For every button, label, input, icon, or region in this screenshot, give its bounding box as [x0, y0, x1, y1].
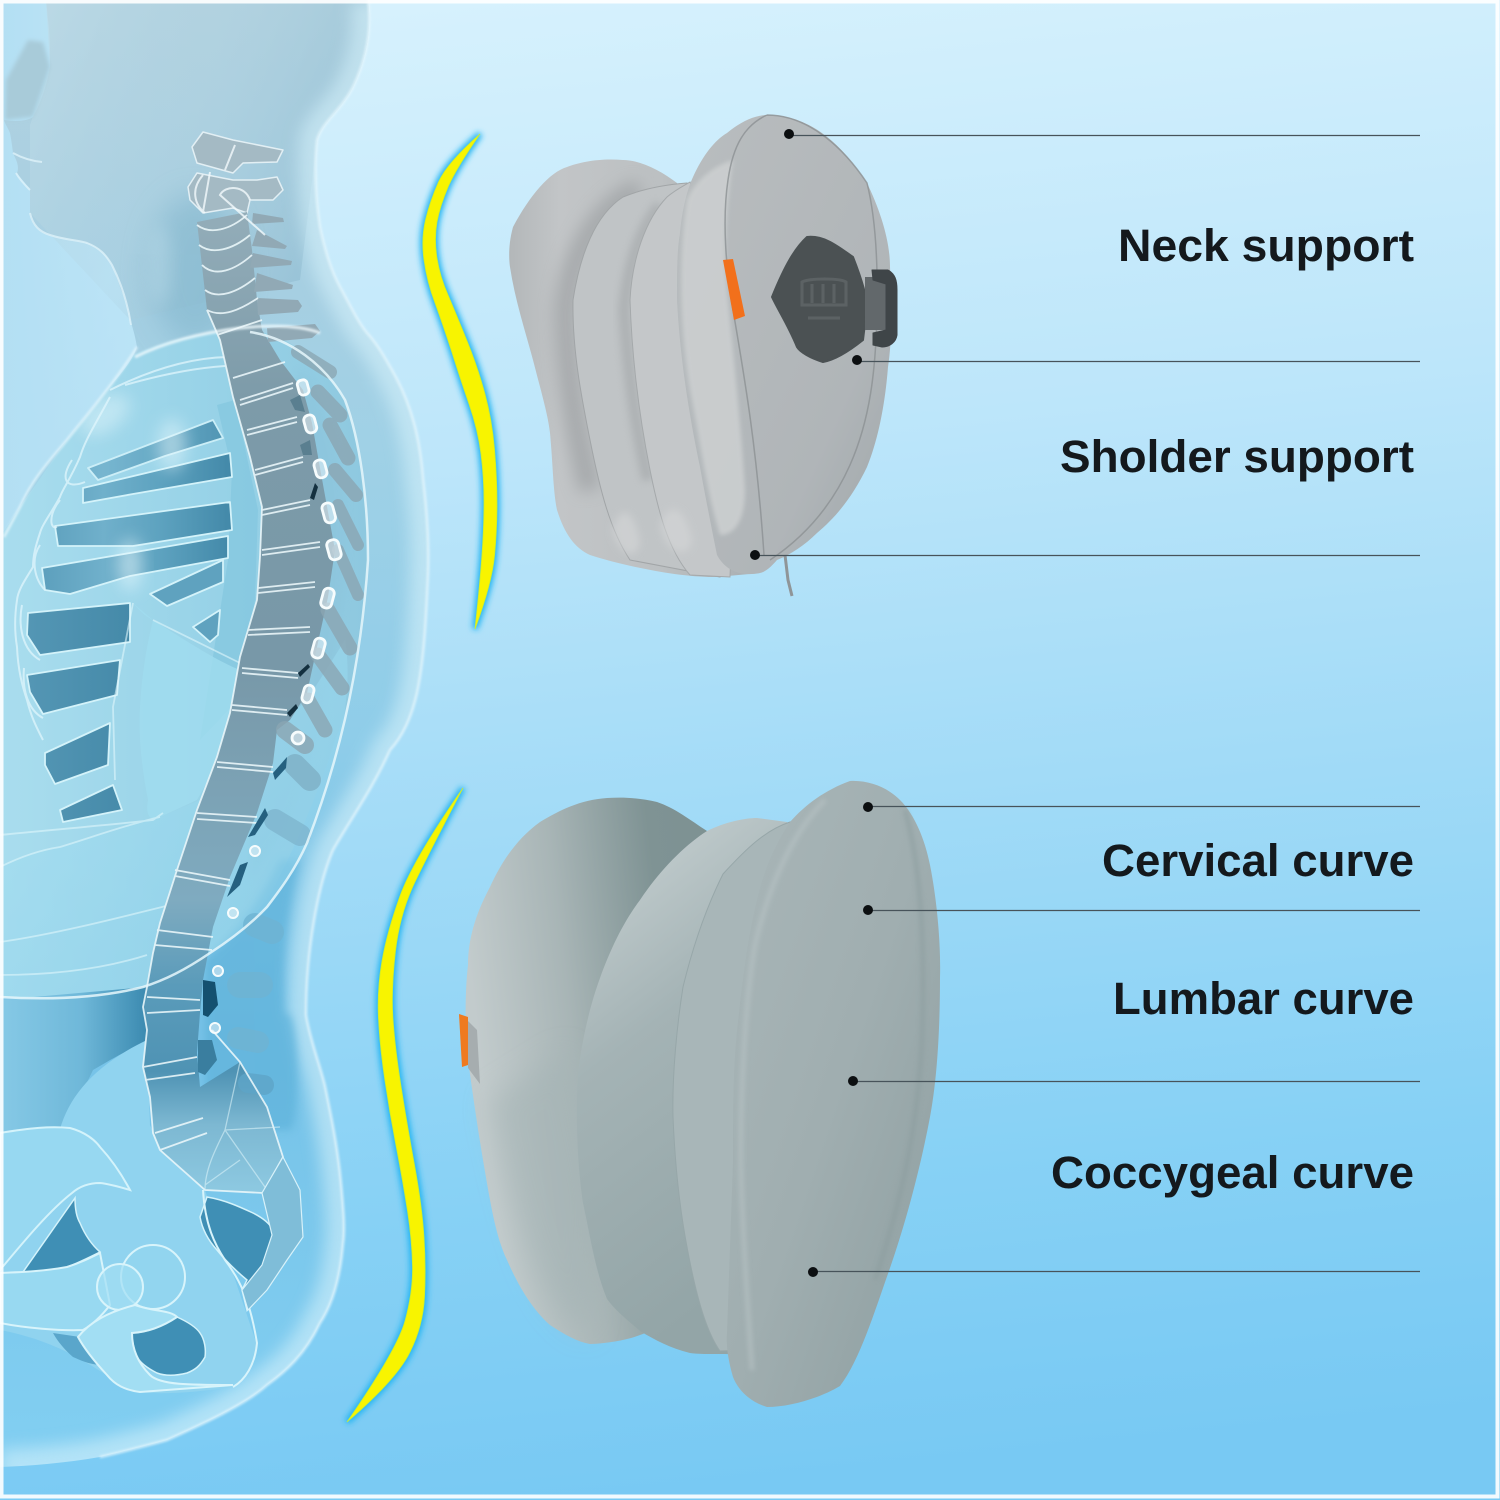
logo patch: [772, 237, 867, 362]
rib gaps: [27, 420, 232, 822]
orange tag: [723, 259, 745, 320]
lobe two crease: [624, 205, 660, 480]
upper arm: [133, 603, 240, 819]
neck highlight: [150, 234, 172, 297]
torso base: [0, 330, 368, 998]
patch logo mark: [802, 279, 846, 318]
ilium hook: [0, 1127, 130, 1270]
back lobe: [466, 798, 720, 1344]
right edge band: [875, 810, 923, 1280]
body outline glow: [4, 0, 428, 1457]
lower back shade: [205, 860, 300, 1130]
front body: [677, 115, 891, 574]
pelvis: [0, 1040, 257, 1393]
rib glows: [73, 386, 186, 591]
background left tint: [0, 0, 320, 560]
back spinous processes: [238, 352, 358, 1085]
label: Sholder support: Sholder support: [1060, 431, 1414, 482]
zipper pull: [785, 555, 792, 596]
mouth lines: [13, 153, 131, 325]
neck spinous processes: [250, 213, 320, 342]
back lobe lower lightening: [490, 1050, 600, 1335]
coccyx: [242, 1157, 303, 1310]
curve: lower spine: [347, 788, 463, 1422]
label: Neck support: Neck support: [1118, 220, 1414, 271]
stitched seam: [725, 115, 877, 560]
vertebral column: [143, 212, 335, 1193]
third lobe: [673, 822, 790, 1351]
spine: [135, 132, 358, 1310]
back lobe: [509, 159, 760, 577]
femur and hip joint: [0, 1190, 257, 1392]
strap: [865, 277, 887, 330]
nose shading: [5, 40, 50, 120]
rim glow clipped to body: [0, 0, 428, 1467]
facet joints: [210, 379, 342, 1033]
illustration: transparent human body with spine: [0, 0, 428, 1467]
back lobe crease shadow: [565, 190, 640, 490]
neck vertebra lines: [195, 145, 265, 235]
rib outlines: [15, 357, 227, 740]
front disc seam: [741, 800, 825, 1370]
head shading: [30, 0, 369, 320]
middle lobe: [577, 818, 790, 1355]
neck shadow: [150, 195, 240, 345]
body silhouette: [0, 0, 428, 1467]
arm outline crossing spine: [0, 332, 368, 998]
forearm and arm mass: [0, 640, 348, 998]
vertebra disc lines: [143, 215, 320, 1193]
sternum band: [213, 400, 258, 668]
strap tab: [872, 270, 897, 347]
dark foramina: [198, 395, 318, 1075]
label: Coccygeal curve: Coccygeal curve: [1051, 1147, 1414, 1198]
lower back block: [0, 987, 147, 1133]
curve: upper spine: [423, 134, 497, 629]
middle lobe two: [573, 183, 760, 577]
pillow: neck pillow, upper: [509, 115, 897, 596]
sacrum lines: [205, 1062, 280, 1190]
front roll highlight: [681, 160, 745, 535]
middle lobe three: [630, 182, 740, 577]
back band between arm and spine: [250, 370, 346, 880]
collar highlight: [135, 326, 320, 357]
forearm lines: [0, 603, 240, 975]
pillow: lumbar pillow, lower: [459, 781, 940, 1407]
label: Lumbar curve: Lumbar curve: [1113, 973, 1414, 1024]
front disc: [727, 781, 940, 1407]
orange tag with loop: [459, 1014, 480, 1084]
callout lines and dots: [750, 129, 1420, 1277]
bottom highlights: [612, 509, 692, 554]
pelvis dark openings: [23, 1197, 283, 1375]
label: Cervical curve: Cervical curve: [1102, 835, 1414, 886]
upper cervical vertebrae: [188, 132, 283, 213]
